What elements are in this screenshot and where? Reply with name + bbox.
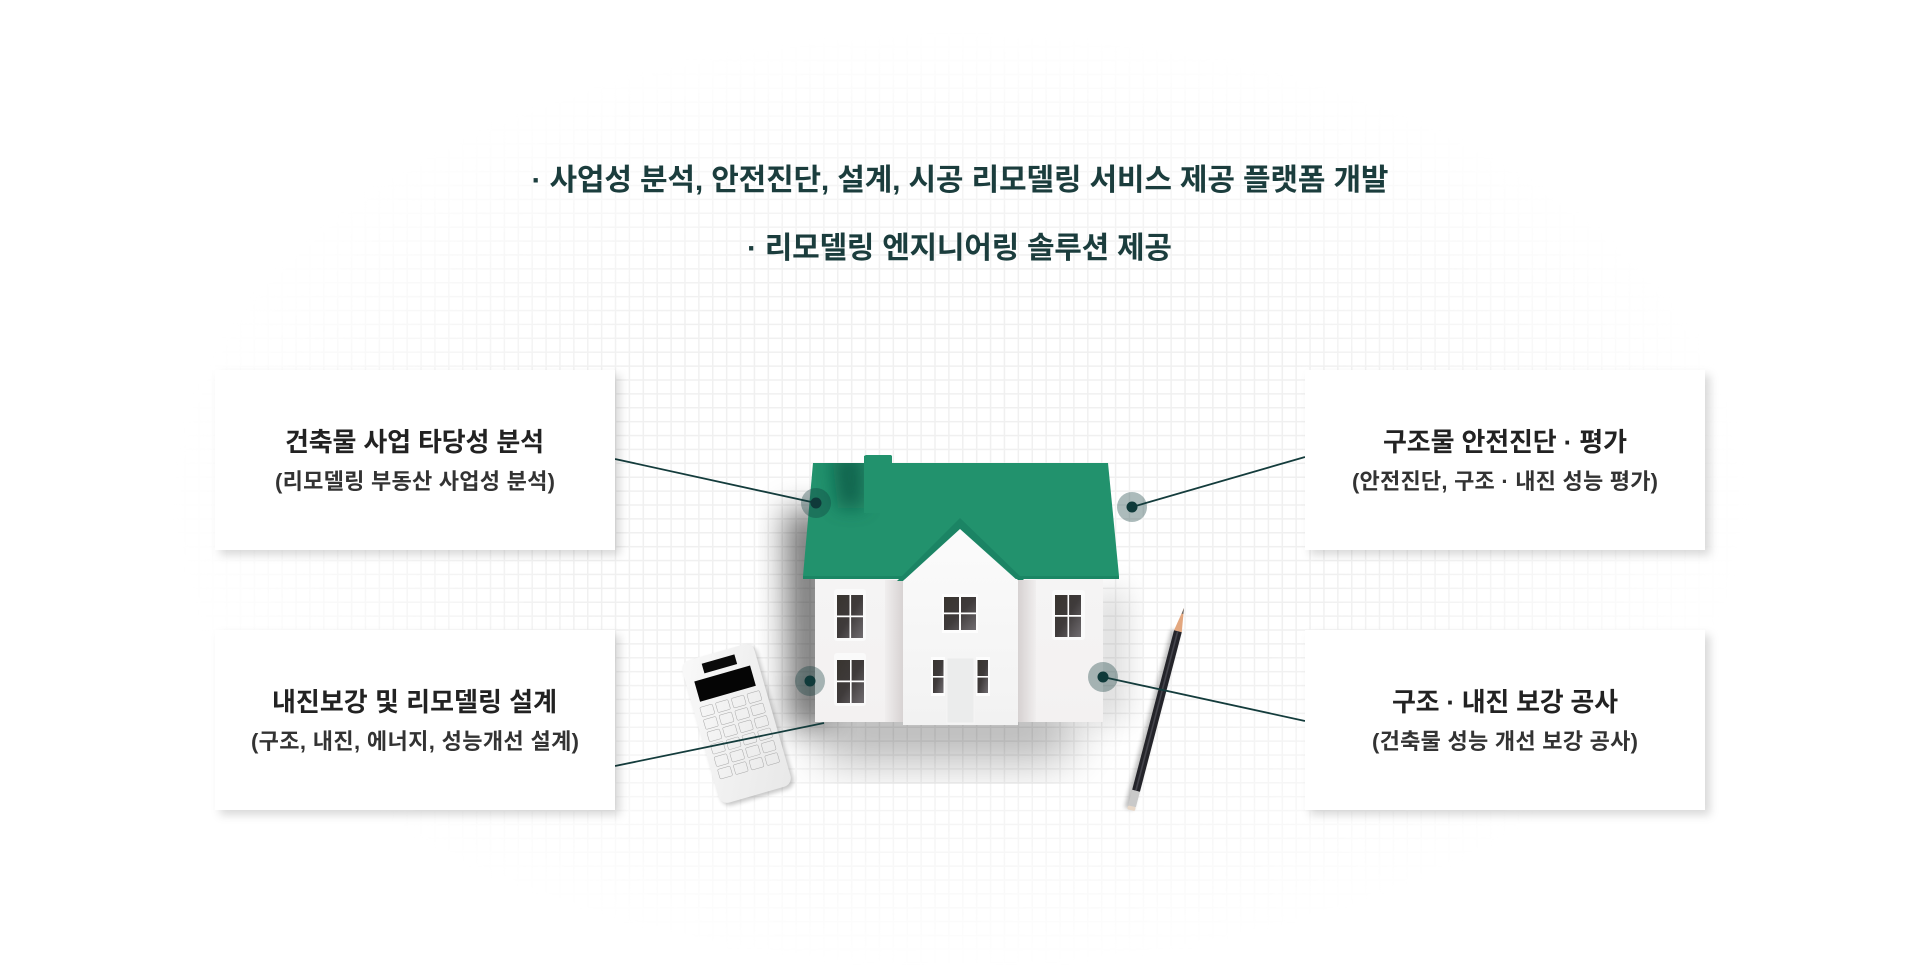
panel: feasibility analysis bbox=[215, 370, 615, 550]
left lower window bbox=[834, 653, 866, 706]
panel: safety diagnosis: (안전진단, 구조 · 내진 성능 평가) bbox=[1352, 469, 1658, 494]
gable roof trim bbox=[897, 518, 1024, 581]
left upper window bbox=[834, 589, 866, 641]
panel: reinforcement construction: 구조 · 내진 보강 공사 bbox=[1392, 687, 1618, 717]
roof bbox=[803, 463, 1119, 579]
door bbox=[947, 658, 974, 723]
chimney bbox=[864, 455, 892, 513]
wall shaded recesses bbox=[885, 580, 1036, 722]
icon: calculator bbox=[680, 641, 796, 808]
panel: safety diagnosis bbox=[1305, 370, 1705, 550]
roof lower edge bbox=[803, 576, 1119, 579]
panel: seismic reinforcement design: (구조, 내진, 에너지, 성능개선 설계) bbox=[251, 729, 579, 754]
title: platform description: · 리모델링 엔지니어링 솔루션 제공 bbox=[747, 232, 1172, 265]
icon: pencil bbox=[1124, 606, 1188, 811]
panel: feasibility analysis: 건축물 사업 타당성 분석 bbox=[285, 427, 544, 457]
connector line: top left bbox=[615, 459, 816, 503]
center window bbox=[942, 594, 978, 633]
panel: reinforcement construction: (건축물 성능 개선 보강 공사) bbox=[1372, 729, 1638, 754]
connector line: top right bbox=[1132, 457, 1305, 507]
panel: safety diagnosis: 구조물 안전진단 · 평가 bbox=[1383, 427, 1627, 457]
right window bbox=[1052, 590, 1085, 640]
panel: reinforcement construction bbox=[1305, 630, 1705, 810]
marker: bottom left bbox=[795, 666, 825, 696]
marker: bottom right bbox=[1088, 662, 1118, 692]
panel: seismic reinforcement design bbox=[215, 630, 615, 810]
door side windows bbox=[931, 657, 990, 696]
house walls bbox=[815, 575, 1103, 722]
chimney shadow bbox=[832, 455, 864, 508]
marker: top left bbox=[801, 488, 831, 518]
panel: seismic reinforcement design: 내진보강 및 리모델링 설계 bbox=[272, 687, 557, 717]
illustration: house bbox=[803, 455, 1119, 725]
house drop shadow bbox=[785, 510, 1125, 760]
title: platform description: · 사업성 분석, 안전진단, 설계, 시공 리모델링 서비스 제공 플랫폼 개발 bbox=[532, 164, 1388, 197]
front gable facade bbox=[903, 529, 1018, 725]
connector line: bottom right bbox=[1103, 677, 1305, 721]
connector line: bottom left bbox=[615, 723, 824, 766]
marker: top right bbox=[1117, 492, 1147, 522]
title: platform description bbox=[532, 164, 1388, 265]
panel: feasibility analysis: (리모델링 부동산 사업성 분석) bbox=[275, 469, 555, 494]
